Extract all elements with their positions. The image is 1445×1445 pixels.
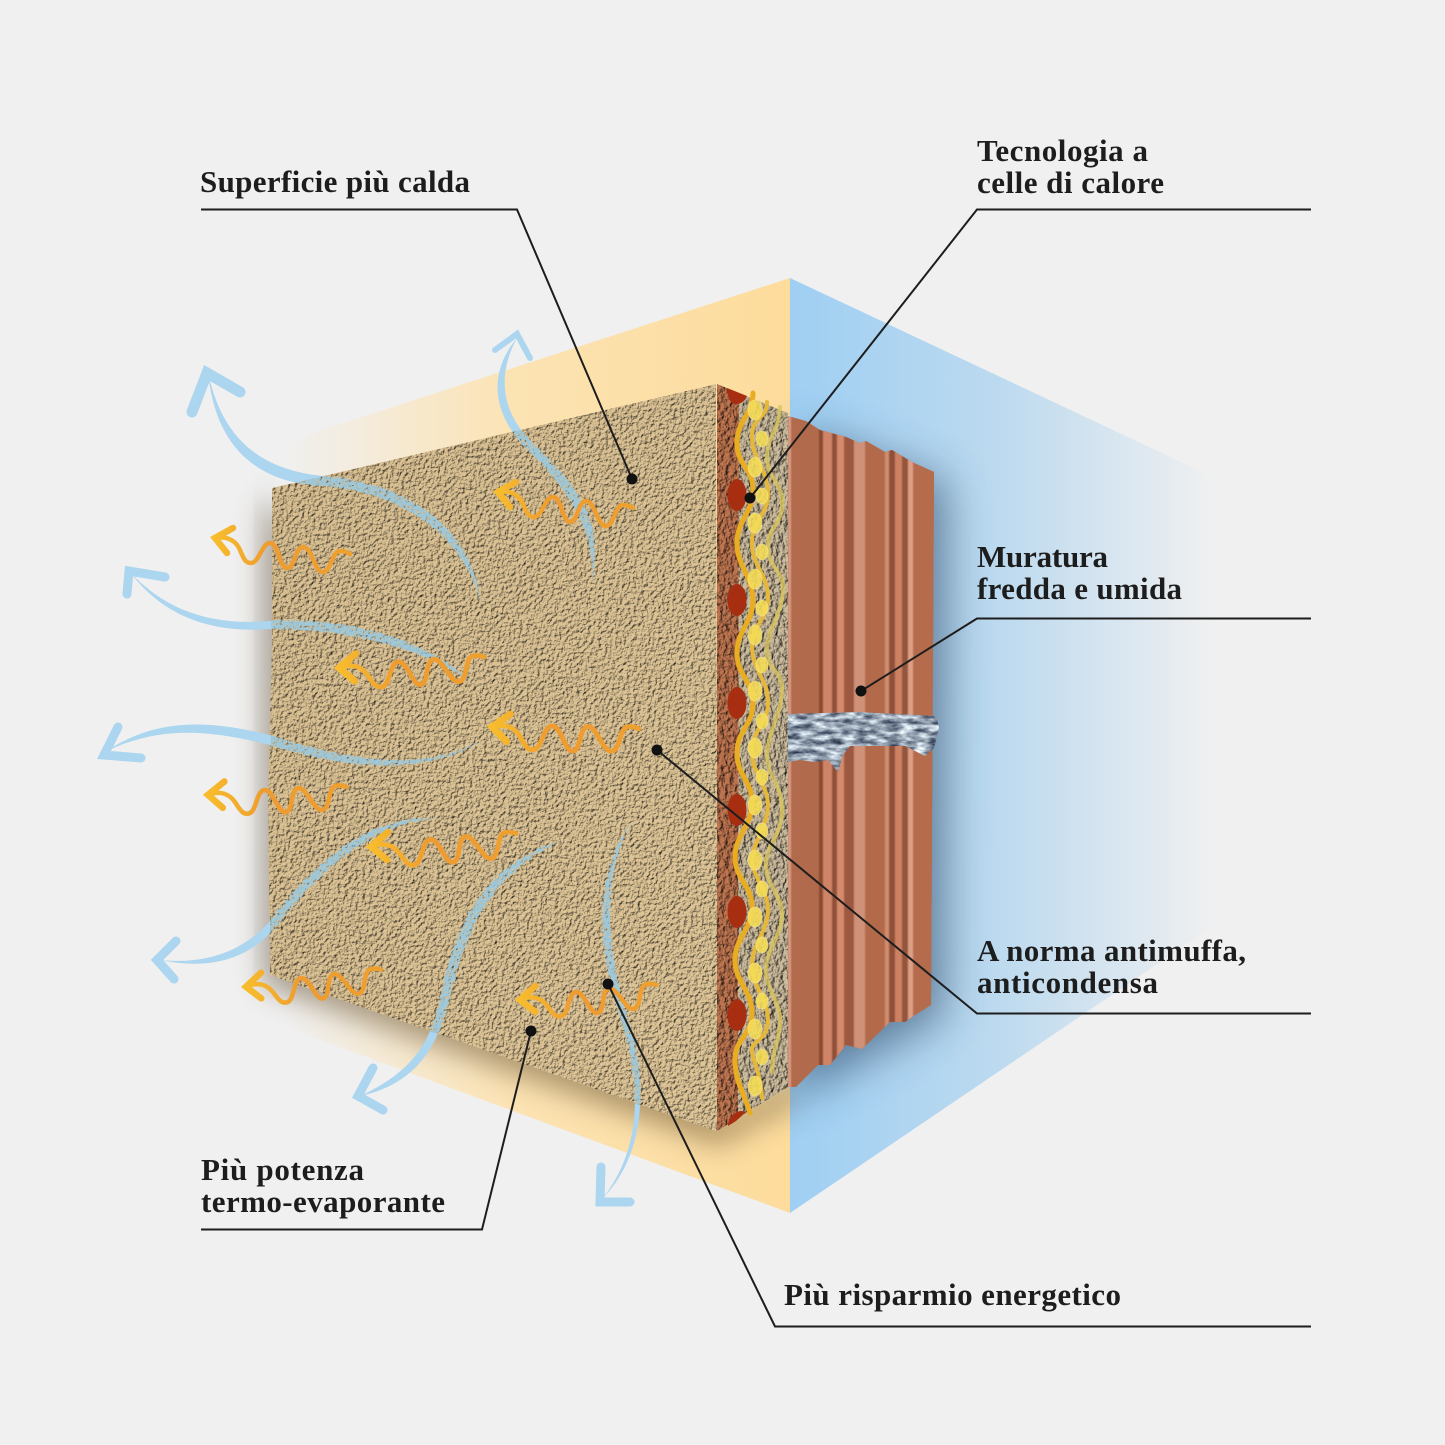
- heat wave arrow 6: [369, 806, 520, 882]
- callout: Tecnologia a celle di calore: Tecnologia a: [977, 133, 1148, 168]
- brick wall: [788, 410, 938, 1100]
- blue moisture arrow 7: [495, 334, 595, 582]
- callout: Più risparmio energetico: Più risparmio energetico: [784, 1277, 1121, 1312]
- mortar joint: [788, 712, 939, 772]
- callout: Tecnologia a celle di calore: celle di calore: [977, 165, 1164, 200]
- callout: Più potenza termo-evaporante: termo-evaporante: [201, 1184, 445, 1219]
- section: heat waves: [735, 393, 783, 1113]
- section: red heat cells: [727, 388, 747, 1126]
- callout: Muratura fredda e umida: fredda e umida: [977, 571, 1182, 606]
- blue moisture arrow 3: [104, 725, 482, 765]
- section: insulating plaster layer: [717, 384, 788, 1131]
- heat wave arrow 8: [518, 959, 661, 1033]
- heat wave arrow 2: [498, 482, 633, 526]
- blue moisture arrow 1: [192, 372, 481, 603]
- callout: A norma antimuffa, anticondensa: [652, 744, 1311, 1014]
- heat wave arrow 7: [244, 944, 385, 1020]
- callout: Superficie più calda: [200, 164, 638, 484]
- callout: Muratura fredda e umida: [856, 539, 1311, 696]
- section: render layer: [717, 384, 739, 1131]
- callout: A norma antimuffa, anticondensa: A norma antimuffa,: [977, 933, 1246, 968]
- plaster front face: [268, 384, 718, 1132]
- brick: vertical ridges: [788, 410, 938, 1100]
- blue moisture arrow 6: [600, 820, 640, 1202]
- callout: Tecnologia a celle di calore: [744, 133, 1311, 504]
- wall cross-section: [717, 384, 788, 1131]
- blue moisture arrow 5: [358, 840, 562, 1110]
- callout: Più potenza termo-evaporante: Più potenza: [201, 1152, 364, 1187]
- callout: Più risparmio energetico: [602, 978, 1311, 1326]
- warm side panel: [285, 278, 790, 1213]
- heat wave arrow 5: [206, 761, 350, 829]
- callout: Superficie più calda: Superficie più calda: [200, 164, 470, 199]
- blue moisture arrow 2: [127, 571, 472, 682]
- blue moisture arrow 4: [157, 818, 440, 979]
- heat wave arrow 1: [215, 528, 350, 572]
- cold side panel: [790, 278, 1215, 1213]
- callout: Più potenza termo-evaporante: [201, 1026, 536, 1230]
- heat wave arrow 4: [491, 701, 641, 763]
- callout: A norma antimuffa, anticondensa: anticondensa: [977, 965, 1158, 1000]
- shadow behind wall: [258, 430, 946, 1146]
- section: yellow bubbles: [748, 400, 768, 1096]
- callout: Muratura fredda e umida: Muratura: [977, 539, 1108, 574]
- heat wave arrow 3: [337, 630, 488, 704]
